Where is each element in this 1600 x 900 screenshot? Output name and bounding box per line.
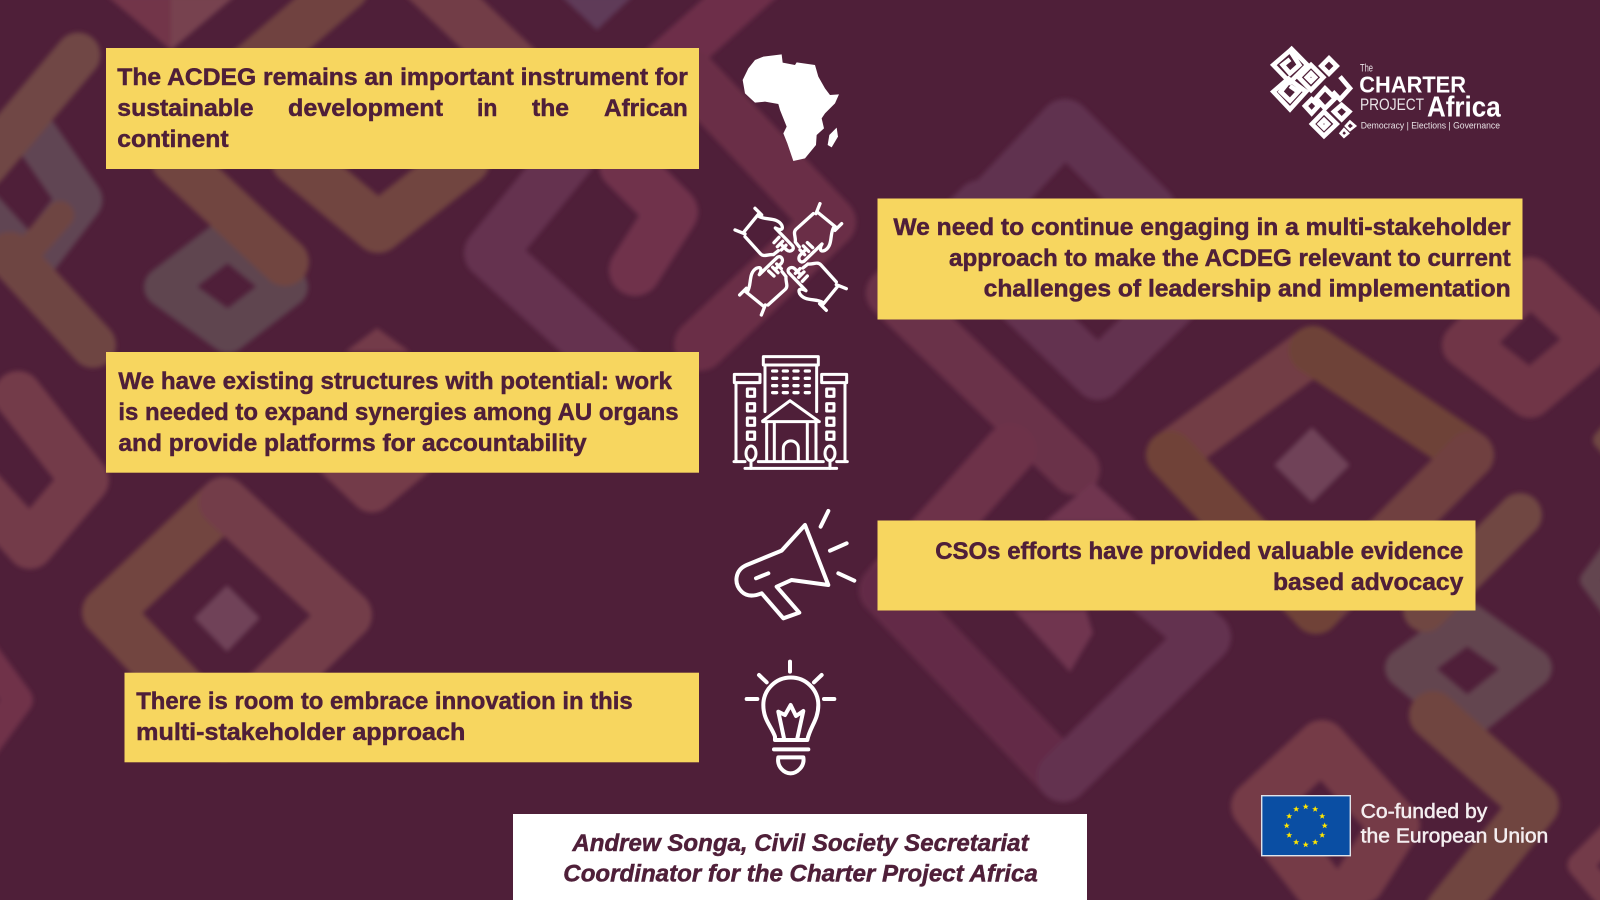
logo: EU co-funded (1262, 796, 1548, 856)
icon: light bulb (747, 662, 834, 773)
logo: The Charter Project Africa: Democracy | Elections | Governance (1361, 120, 1500, 130)
panel: existing structures (106, 352, 699, 473)
panel: ACDEG important instrument: The ACDEG remains an important instrument for (117, 64, 688, 91)
panel: ACDEG important instrument (106, 48, 699, 169)
attribution: Andrew Songa: Coordinator for the Charter Project Africa (563, 861, 1038, 888)
panel: ACDEG important instrument: development (288, 95, 443, 122)
icon: Africa map (743, 54, 839, 161)
logo: The Charter Project Africa: CHARTER (1359, 72, 1466, 98)
attribution: Andrew Songa (513, 814, 1087, 900)
panel: CSOs efforts (878, 520, 1476, 610)
panel: multi-stakeholder approach: challenges of leadership and implementation (984, 276, 1511, 303)
panel: multi-stakeholder approach: approach to make the ACDEG relevant to current (949, 245, 1511, 272)
panel: existing structures: and provide platforms for accountability (118, 430, 587, 457)
panel: existing structures: is needed to expand synergies among AU organs (118, 399, 679, 426)
logo: EU co-funded: Co-funded by (1361, 801, 1487, 823)
panel: ACDEG important instrument: sustainable (117, 95, 254, 122)
panel: ACDEG important instrument: the (532, 95, 569, 122)
logo mark (1273, 47, 1355, 137)
panel: ACDEG important instrument: continent (117, 126, 229, 153)
logo: The Charter Project Africa: The (1360, 63, 1373, 75)
panel: multi-stakeholder approach (878, 198, 1522, 320)
panel: ACDEG important instrument: in (477, 95, 497, 122)
panel: existing structures: We have existing structures with potential: work (118, 368, 672, 395)
panel: CSOs efforts: based advocacy (1273, 569, 1464, 596)
EU flag (1262, 796, 1350, 856)
panel: multi-stakeholder approach: We need to continue engaging in a multi-stakeholder (893, 214, 1511, 241)
panel: embrace innovation (124, 673, 699, 762)
panel: embrace innovation: There is room to embrace innovation in this (136, 688, 633, 715)
icon: four hands joined (735, 204, 846, 315)
logo: The Charter Project Africa: PROJECT (1360, 95, 1424, 114)
panel: embrace innovation: multi-stakeholder approach (136, 719, 465, 746)
panel: CSOs efforts: CSOs efforts have provided valuable evidence (935, 538, 1463, 565)
logo: The Charter Project Africa: Africa (1427, 92, 1501, 124)
logo: EU co-funded: the European Union (1361, 826, 1548, 848)
icon: government building (734, 357, 847, 468)
logo: The Charter Project Africa (1273, 47, 1501, 137)
attribution: Andrew Songa: Andrew Songa, Civil Society Secretariat (571, 830, 1029, 857)
icon: megaphone (736, 511, 854, 618)
panel: ACDEG important instrument: African (604, 95, 688, 122)
